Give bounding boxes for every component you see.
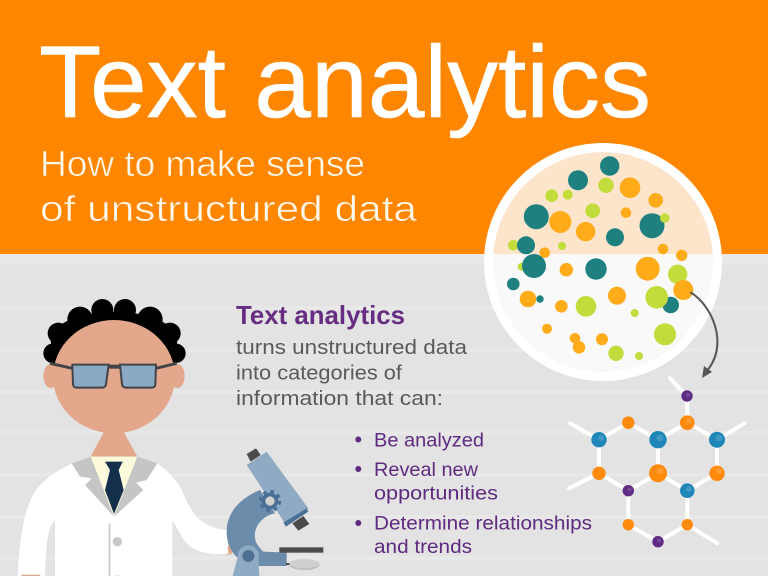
neck, ears and head <box>43 320 185 457</box>
bullet list: Determine relationships <box>374 512 592 534</box>
microscope <box>227 448 323 576</box>
bullet list <box>355 430 592 558</box>
subtitle: of unstructured data <box>40 188 418 229</box>
bullet list: Reveal new <box>374 459 479 481</box>
intro text <box>236 337 468 410</box>
tie <box>105 462 124 514</box>
lab coat <box>17 463 228 576</box>
tube <box>247 452 308 523</box>
subtitle: How to make sense <box>40 143 365 184</box>
hand <box>223 546 232 555</box>
focus gear <box>260 491 280 511</box>
intro text: information that can: <box>236 388 443 410</box>
bullet list: Be analyzed <box>374 430 484 452</box>
eyepiece <box>247 448 261 462</box>
shirt <box>91 457 137 517</box>
arrow from dish to molecule <box>690 292 717 378</box>
objective lens <box>292 516 309 531</box>
subtitle <box>40 143 418 229</box>
stage <box>279 547 323 553</box>
coat seam and button <box>22 523 122 576</box>
molecule network <box>569 378 744 547</box>
mirror <box>286 559 319 570</box>
arm and base block <box>227 490 287 566</box>
foot and pivot <box>233 545 259 576</box>
bullet list: and trends <box>374 536 472 558</box>
lapels <box>72 457 157 517</box>
title: Text analytics <box>39 25 651 139</box>
glasses <box>50 363 177 388</box>
bullet list: opportunities <box>374 482 498 504</box>
intro text: turns unstructured data <box>236 337 468 359</box>
heading: text analytics: Text analytics <box>236 300 405 330</box>
scientist character <box>17 299 232 576</box>
hair <box>43 299 186 368</box>
header band <box>0 0 768 254</box>
intro text: into categories of <box>236 362 402 384</box>
petri dish with data dots <box>484 143 722 381</box>
